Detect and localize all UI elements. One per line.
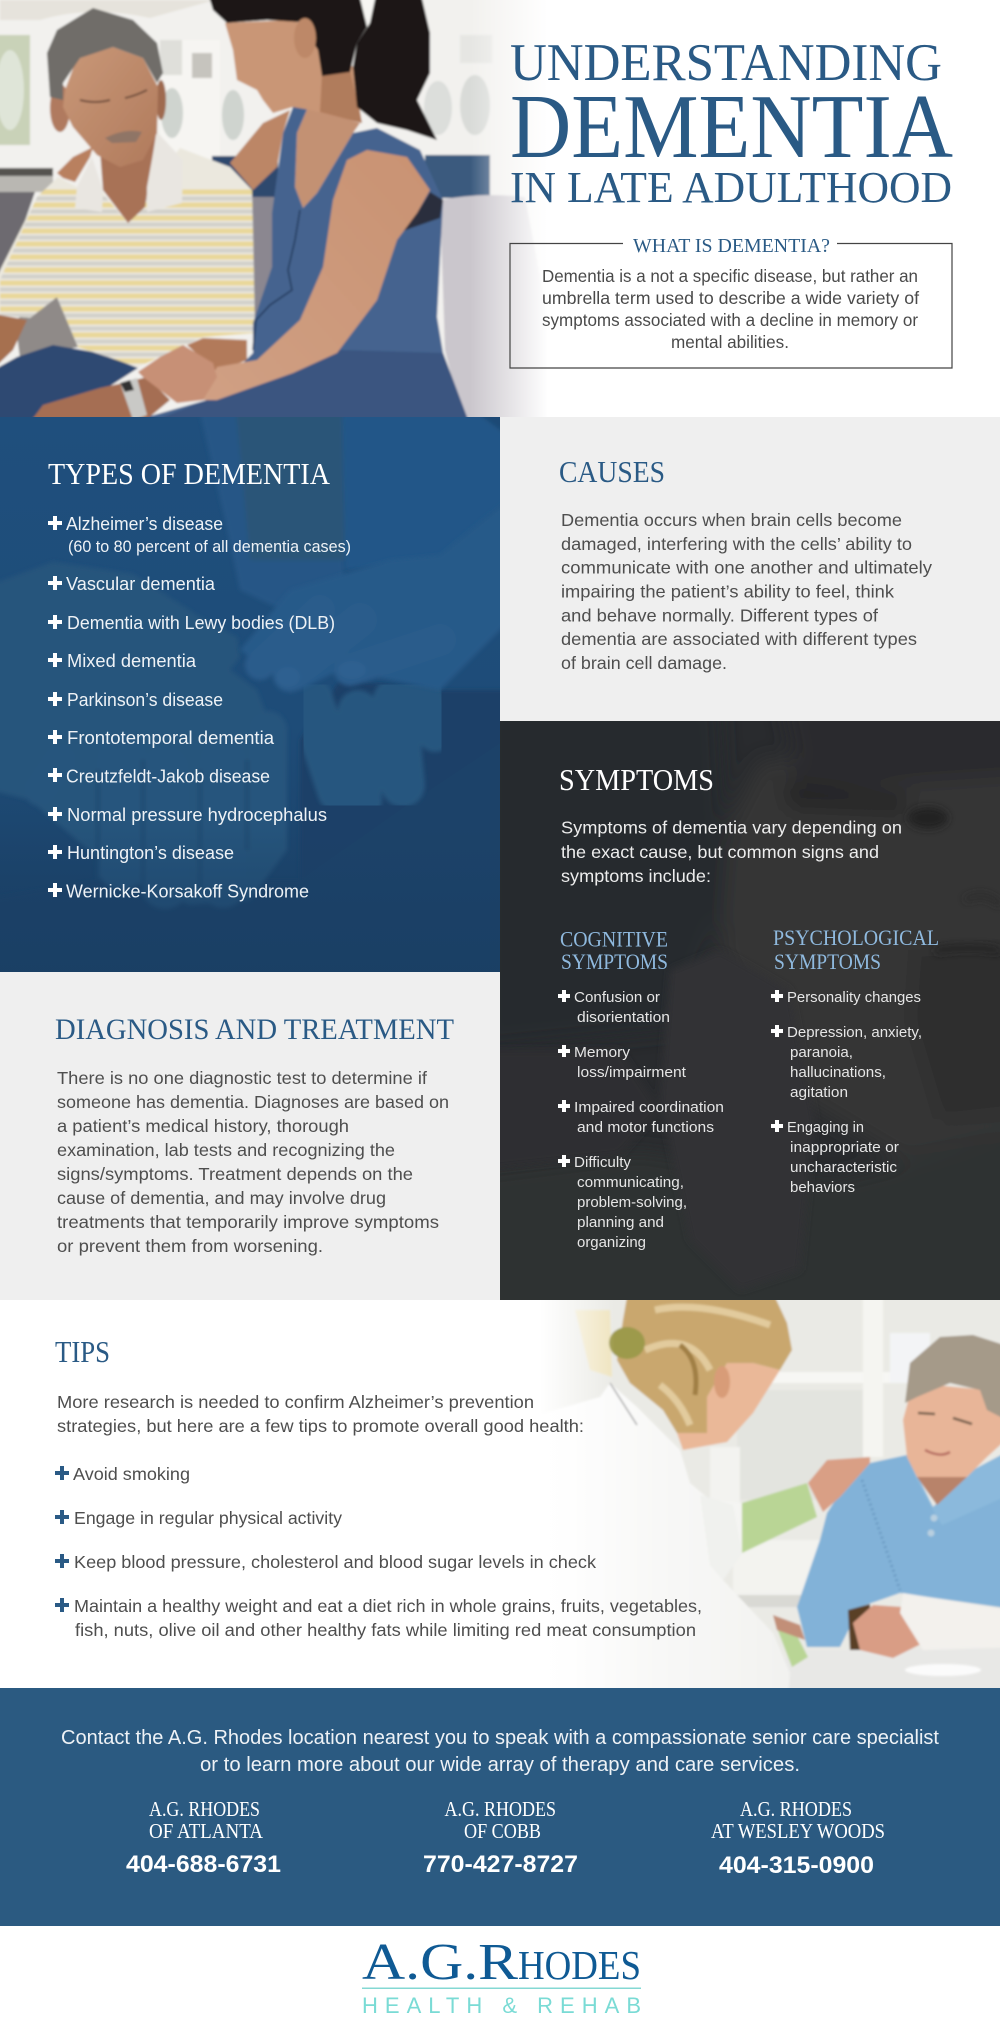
- list: dementia types: Vascular dementia: [66, 574, 216, 594]
- list: dementia types: [48, 514, 351, 902]
- heading: causes: CAUSES: [559, 454, 665, 489]
- list: psychological: hallucinations,: [790, 1064, 886, 1081]
- lower hand fingers (younger): [310, 690, 435, 800]
- panel: diagnosis and treatment: [0, 972, 500, 1300]
- title: DEMENTIA: [510, 76, 953, 177]
- diagnosis text: someone has dementia. Diagnoses are based on: [57, 1092, 449, 1112]
- sofa: [0, 190, 36, 273]
- doctor hand: [808, 1457, 870, 1512]
- subheading: cognitive: COGNITIVE: [560, 926, 668, 952]
- table: [640, 1648, 1000, 1710]
- doctor hair: [616, 1300, 793, 1434]
- heading: tips: TIPS: [55, 1334, 110, 1369]
- diagnosis text: or prevent them from worsening.: [57, 1236, 323, 1256]
- list: psychological: uncharacteristic: [790, 1159, 898, 1176]
- list: dementia types: Alzheimer’s disease: [66, 514, 223, 534]
- list: dementia types: (60 to 80 percent of all dementia cases): [68, 538, 351, 556]
- man's head: [50, 84, 70, 132]
- neck and collar: [100, 128, 157, 223]
- list: psychological: Personality changes: [787, 989, 921, 1006]
- diagnosis text: cause of dementia, and may involve drug: [57, 1188, 386, 1208]
- list: cognitive: [558, 989, 724, 1251]
- lower-left hand (older): [0, 562, 287, 905]
- list: psychological: behaviors: [790, 1179, 855, 1196]
- diagnosis text: treatments that temporarily improve symptoms: [57, 1212, 439, 1232]
- list: cognitive: Confusion or: [574, 989, 660, 1006]
- causes text: Dementia occurs when brain cells become: [561, 510, 902, 530]
- list: cognitive: problem-solving,: [577, 1194, 687, 1211]
- panel: symptoms: [500, 721, 1000, 1300]
- photo: doctor and patient: [564, 1300, 1000, 1688]
- heading: what is dementia: WHAT IS DEMENTIA?: [633, 235, 830, 257]
- causes text: of brain cell damage.: [561, 653, 727, 673]
- causes text: impairing the patient’s ability to feel, think: [561, 582, 894, 602]
- panel: causes: [500, 417, 1000, 721]
- location: cobb: OF COBB: [464, 1819, 541, 1843]
- list: tips: Keep blood pressure, cholesterol and blood sugar levels in check: [74, 1552, 596, 1572]
- panel: what is dementia: [510, 235, 952, 368]
- location: wesley woods: A.G. RHODES: [740, 1797, 852, 1821]
- list: dementia types: Dementia with Lewy bodies (DLB): [67, 613, 335, 633]
- list: dementia types: Huntington’s disease: [67, 843, 234, 863]
- list: psychological: Engaging in: [787, 1119, 864, 1136]
- list: dementia types: Parkinson’s disease: [67, 690, 223, 710]
- list: dementia types: Normal pressure hydrocephalus: [67, 805, 327, 825]
- logo: A.G. Rhodes Health & Rehab: HEALTH & REHAB: [362, 1993, 641, 2018]
- list: dementia types: Frontotemporal dementia: [67, 728, 275, 748]
- location: cobb: A.G. RHODES: [444, 1797, 556, 1821]
- heading: diagnosis and treatment: DIAGNOSIS AND TREATMENT: [55, 1014, 454, 1046]
- contact text: Contact the A.G. Rhodes location nearest you to speak with a compassionate senior care specialist: [61, 1727, 939, 1749]
- list: dementia types: Creutzfeldt-Jakob disease: [66, 766, 270, 786]
- list: cognitive: Impaired coordination: [574, 1099, 724, 1116]
- causes text: and behave normally. Different types of: [561, 606, 878, 626]
- fade to white: [540, 1300, 612, 1415]
- definition text: Dementia is a not a specific disease, but rather an: [542, 266, 918, 286]
- photo: man and caregiver: [0, 0, 536, 417]
- subheading: psychological: SYMPTOMS: [774, 949, 881, 974]
- definition text: umbrella term used to describe a wide variety of: [542, 288, 919, 308]
- patient face and hair: [902, 1384, 1000, 1478]
- logo: A.G. Rhodes Health & Rehab: A.G.R: [362, 1934, 518, 1991]
- photo: older woman's face and hands: [664, 762, 1000, 1288]
- list: cognitive: disorientation: [577, 1009, 670, 1026]
- upper hand (younger): [242, 510, 500, 692]
- diagnosis text: There is no one diagnostic test to determine if: [57, 1068, 427, 1088]
- subheading: cognitive: SYMPTOMS: [561, 949, 668, 974]
- diagnosis text: a patient’s medical history, thorough: [57, 1116, 349, 1136]
- list: cognitive: organizing: [577, 1234, 646, 1251]
- definition text: symptoms associated with a decline in memory or: [542, 310, 918, 330]
- woman's dress: [147, 106, 444, 417]
- woman's hand on shoulder: [57, 147, 93, 182]
- heading: symptoms: SYMPTOMS: [559, 762, 714, 797]
- list: cognitive: loss/impairment: [577, 1064, 687, 1081]
- list: cognitive: Memory: [574, 1044, 631, 1061]
- list: psychological: paranoia,: [790, 1044, 853, 1061]
- location: atlanta: OF ATLANTA: [149, 1819, 264, 1843]
- heading: types of dementia: TYPES OF DEMENTIA: [48, 456, 331, 491]
- list: tips: Avoid smoking: [73, 1464, 190, 1484]
- panel: tips: [55, 1334, 702, 1640]
- woman's hair: [207, 0, 367, 76]
- location: cobb: 770-427-8727: [423, 1851, 578, 1878]
- list: tips: fish, nuts, olive oil and other healthy fats while limiting red meat consumption: [75, 1620, 696, 1640]
- symptoms intro: [561, 818, 902, 886]
- man's jeans: [0, 344, 138, 417]
- list: tips: Engage in regular physical activity: [74, 1508, 342, 1528]
- man's forearms: [0, 314, 28, 364]
- location: wesley woods: 404-315-0900: [719, 1852, 874, 1879]
- title: UNDERSTANDING: [510, 34, 942, 92]
- column: cognitive symptoms: [558, 926, 724, 1251]
- patient sweater: [797, 1445, 1000, 1647]
- location: atlanta: [126, 1797, 281, 1878]
- tips intro: strategies, but here are a few tips to promote overall good health:: [57, 1416, 584, 1436]
- hands and watch: [32, 376, 171, 417]
- symptoms intro: symptoms include:: [561, 866, 711, 886]
- doctor green sleeve: [742, 1483, 817, 1553]
- list: cognitive: and motor functions: [577, 1119, 714, 1136]
- logo: A.G. Rhodes Health & Rehab: HODES: [518, 1942, 641, 1988]
- causes text: dementia are associated with different types: [561, 629, 917, 649]
- photo: clasped hands: [0, 417, 500, 896]
- panel: types of dementia: [0, 400, 520, 990]
- white fade: [470, 0, 548, 417]
- doctor coat: [566, 1384, 788, 1688]
- column: psychological symptoms: [771, 925, 939, 1196]
- doctor face and ear: [677, 1363, 780, 1450]
- symptoms intro: Symptoms of dementia vary depending on: [561, 818, 902, 838]
- causes text: damaged, interfering with the cells’ ability to: [561, 534, 912, 554]
- causes text: [561, 510, 932, 673]
- panel: contact footer: [0, 1688, 1000, 1926]
- location: wesley woods: [711, 1797, 885, 1879]
- subheading: cognitive: [560, 926, 668, 974]
- pills: [905, 1664, 981, 1676]
- subheading: psychological: [773, 925, 939, 974]
- symptoms intro: the exact cause, but common signs and: [561, 842, 879, 862]
- tips intro: More research is needed to confirm Alzheimer’s prevention: [57, 1392, 534, 1412]
- location: wesley woods: AT WESLEY WOODS: [711, 1819, 885, 1843]
- diagnosis text: [57, 1068, 449, 1256]
- tips intro: [57, 1392, 584, 1436]
- diagnosis text: examination, lab tests and recognizing the: [57, 1140, 395, 1160]
- list: tips: [55, 1464, 702, 1640]
- logo: A.G. Rhodes Health & Rehab: [362, 1934, 641, 2018]
- contact text: [61, 1727, 939, 1776]
- list: tips: Maintain a healthy weight and eat a diet rich in whole grains, fruits, vegetables,: [74, 1596, 702, 1616]
- title: [510, 34, 953, 212]
- subheading: psychological: PSYCHOLOGICAL: [773, 925, 939, 950]
- location: cobb: [423, 1797, 578, 1878]
- location: atlanta: A.G. RHODES: [149, 1797, 260, 1821]
- woman's face: [225, 20, 362, 123]
- patient hand, watch and paper: [848, 1604, 872, 1650]
- title: IN LATE ADULTHOOD: [510, 163, 952, 212]
- man's shirt: [0, 148, 255, 367]
- contact text: or to learn more about our wide array of therapy and care services.: [200, 1754, 800, 1776]
- list: psychological: Depression, anxiety,: [787, 1024, 922, 1041]
- woman's chest: [295, 107, 360, 208]
- woman's arm: [203, 150, 430, 400]
- list: dementia types: Mixed dementia: [67, 651, 197, 671]
- causes text: communicate with one another and ultimately: [561, 558, 932, 578]
- list: psychological: [771, 989, 922, 1196]
- definition text: mental abilities.: [671, 332, 789, 352]
- list: dementia types: Wernicke-Korsakoff Syndrome: [66, 882, 309, 902]
- list: psychological: inappropriate or: [790, 1139, 899, 1156]
- list: psychological: agitation: [790, 1084, 848, 1101]
- list: cognitive: communicating,: [577, 1174, 684, 1191]
- location: atlanta: 404-688-6731: [126, 1851, 281, 1878]
- definition text: [542, 266, 919, 352]
- diagnosis text: signs/symptoms. Treatment depends on the: [57, 1164, 413, 1184]
- list: cognitive: planning and: [577, 1214, 664, 1231]
- woman's back arm: [230, 110, 290, 190]
- list: cognitive: Difficulty: [574, 1154, 632, 1171]
